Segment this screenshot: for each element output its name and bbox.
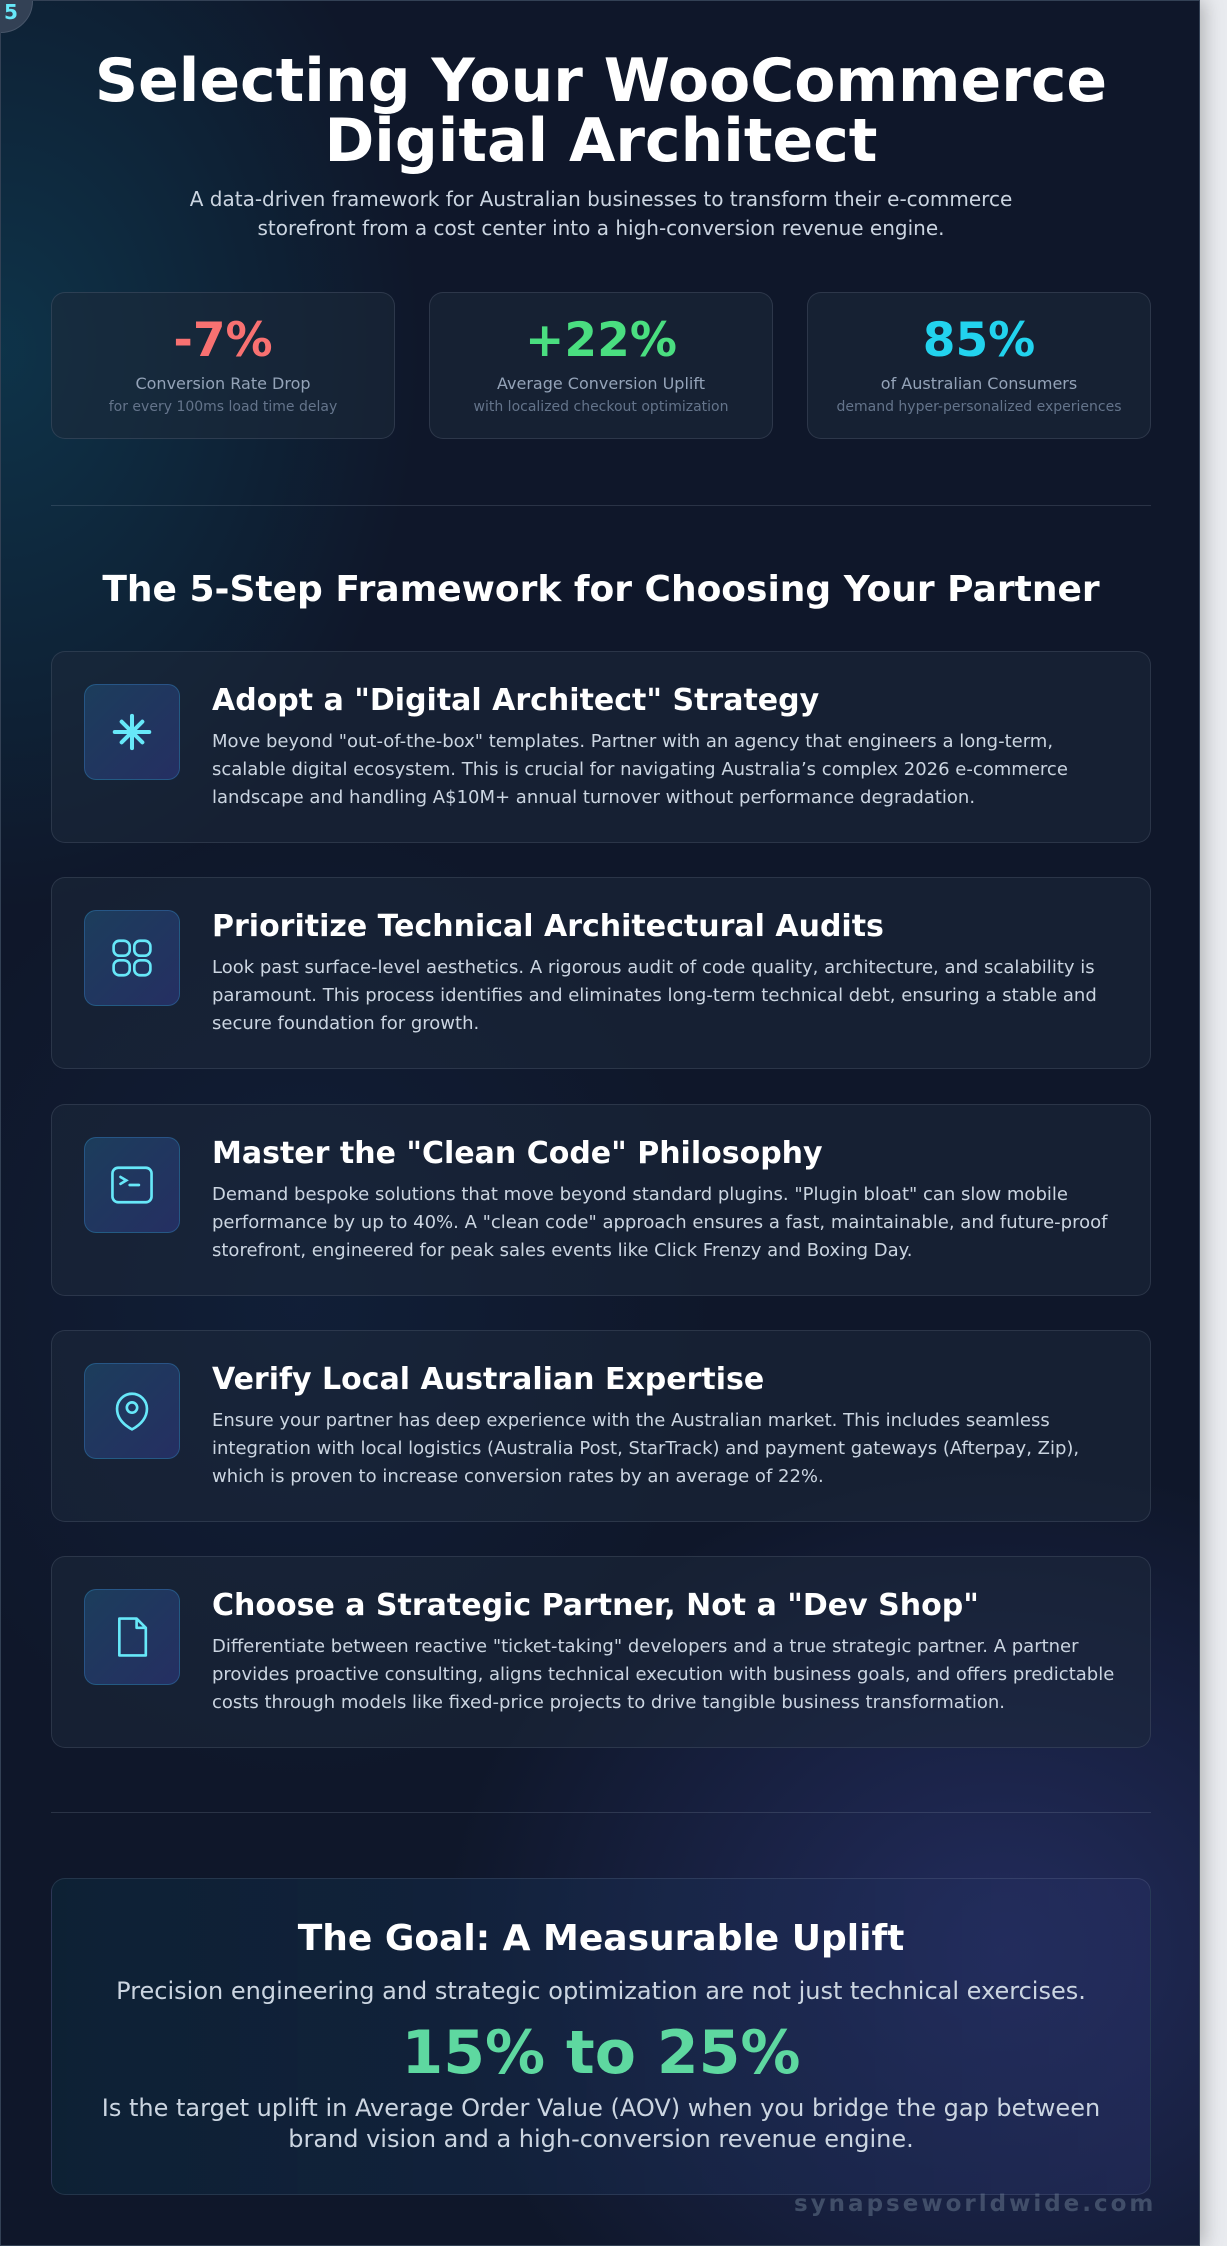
step 3 text: performance by up to 40%. A "clean code" approach ensures a fast, maintainable, and future-proof <box>212 1212 1107 1233</box>
stat card: consumers <box>807 292 1151 439</box>
stat card: conversion uplift: with localized checkout optimization <box>474 399 728 415</box>
stat card: consumers: of Australian Consumers <box>881 374 1077 393</box>
badge <box>0 0 33 33</box>
step 3 text: Demand bespoke solutions that move beyond standard plugins. "Plugin bloat" can slow mobile <box>212 1184 1068 1205</box>
step 2 text: paramount. This process identifies and eliminates long-term technical debt, ensuring a stable and <box>212 985 1097 1006</box>
step 1 text: Move beyond "out-of-the-box" templates. Partner with an agency that engineers a long-term, <box>212 731 1053 752</box>
step 4 text <box>212 1410 1079 1487</box>
subtitle: A data-driven framework for Australian businesses to transform their e-commerce <box>190 187 1012 211</box>
icon: location pin <box>84 1363 180 1459</box>
stat card: conversion drop: for every 100ms load time delay <box>109 399 337 415</box>
step 4 text: Ensure your partner has deep experience with the Australian market. This includes seamless <box>212 1410 1050 1431</box>
step 5 <box>51 1556 1151 1748</box>
step 1 text <box>212 731 1068 808</box>
step 5 text: costs through models like fixed-price projects to drive tangible business transformation. <box>212 1692 1005 1713</box>
step 5 text: provides proactive consulting, aligns technical execution with business goals, and offers predictable <box>212 1664 1114 1685</box>
goal panel <box>51 1878 1151 2195</box>
stat card: conversion drop <box>51 292 395 439</box>
goal conclusion: Is the target uplift in Average Order Value (AOV) when you bridge the gap between <box>102 2094 1100 2122</box>
step 1 text: scalable digital ecosystem. This is crucial for navigating Australia’s complex 2026 e-commerce <box>212 759 1068 780</box>
stat card: conversion drop: Conversion Rate Drop <box>135 374 311 393</box>
step 4 text: integration with local logistics (Australia Post, StarTrack) and payment gateways (Afterpay, Zip), <box>212 1438 1079 1459</box>
title: Selecting Your WooCommerce <box>95 46 1107 116</box>
step 2 text: secure foundation for growth. <box>212 1013 479 1034</box>
stat card: conversion uplift <box>429 292 773 439</box>
stat card: consumers: demand hyper-personalized experiences <box>836 399 1122 415</box>
step 2 <box>51 877 1151 1069</box>
step 5 text: Differentiate between reactive "ticket-taking" developers and a true strategic partner. A partner <box>212 1636 1079 1657</box>
subtitle: storefront from a cost center into a high-conversion revenue engine. <box>257 216 945 240</box>
goal conclusion <box>102 2094 1100 2153</box>
step 3 text <box>212 1184 1108 1261</box>
step 4 <box>51 1330 1151 1522</box>
icon: grid <box>84 910 180 1006</box>
step 2 title: Prioritize Technical Architectural Audits <box>212 909 884 944</box>
step 3 <box>51 1104 1151 1296</box>
icon: asterisk <box>84 684 180 780</box>
goal conclusion: brand vision and a high-conversion revenue engine. <box>288 2125 914 2153</box>
watermark: synapseworldwide.com <box>794 2191 1156 2217</box>
subtitle <box>190 187 1012 240</box>
step 2 text: Look past surface-level aesthetics. A rigorous audit of code quality, architecture, and scalability is <box>212 957 1095 978</box>
goal text: Precision engineering and strategic optimization are not just technical exercises. <box>116 1977 1086 2005</box>
big number: 15% to 25% <box>402 2018 800 2088</box>
step 5 text <box>212 1636 1114 1713</box>
step 3 title: Master the "Clean Code" Philosophy <box>212 1136 823 1171</box>
section heading: The 5-Step Framework for Choosing Your Partner <box>102 569 1100 610</box>
title: Digital Architect <box>324 106 878 176</box>
step 3 text: storefront, engineered for peak sales events like Click Frenzy and Boxing Day. <box>212 1240 912 1261</box>
stat card: consumers: 85% <box>923 313 1035 368</box>
step 1 title: Adopt a "Digital Architect" Strategy <box>212 683 819 718</box>
step 1 text: landscape and handling A$10M+ annual turnover without performance degradation. <box>212 787 975 808</box>
stat card: conversion uplift: Average Conversion Uplift <box>497 374 705 393</box>
title <box>95 46 1107 176</box>
step 2 text <box>212 957 1097 1034</box>
icon: terminal <box>84 1137 180 1233</box>
step 5 title: Choose a Strategic Partner, Not a "Dev Shop" <box>212 1588 979 1623</box>
stat card: conversion drop: -7% <box>173 313 273 368</box>
icon: document <box>84 1589 180 1685</box>
stat card: conversion uplift: +22% <box>525 313 677 368</box>
badge: 5 <box>4 0 18 24</box>
step 1 <box>51 651 1151 843</box>
step 4 text: which is proven to increase conversion rates by an average of 22%. <box>212 1466 824 1487</box>
step 4 title: Verify Local Australian Expertise <box>212 1362 764 1397</box>
goal heading: The Goal: A Measurable Uplift <box>298 1918 904 1959</box>
